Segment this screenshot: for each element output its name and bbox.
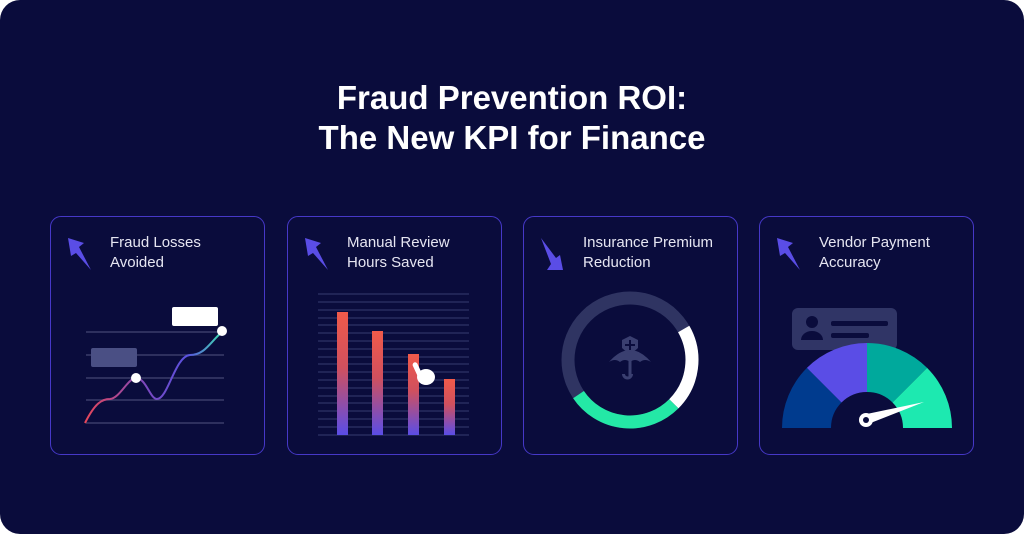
label: insurance: Insurance Premium	[583, 234, 713, 251]
label: manual review	[347, 234, 450, 271]
icon: umbrella shield	[609, 336, 651, 378]
title: The New KPI for Finance	[319, 119, 705, 156]
icon: hand pointer	[412, 361, 435, 385]
icon: arrow up 4	[777, 238, 800, 270]
label: fraud losses: Avoided	[110, 254, 164, 271]
label: vendor: Accuracy	[819, 254, 881, 271]
label: vendor: Vendor Payment	[819, 234, 930, 251]
label: fraud losses	[110, 234, 201, 271]
label: manual review: Hours Saved	[347, 254, 434, 271]
title	[318, 79, 705, 156]
panel: vendor payment accuracy	[759, 216, 974, 455]
icon: arrow down 3	[541, 238, 563, 270]
donut chart	[568, 298, 692, 422]
label: insurance	[583, 234, 713, 271]
panel: fraud losses avoided	[50, 216, 265, 455]
label: manual review: Manual Review	[347, 234, 450, 251]
id card	[792, 308, 897, 350]
panel: manual review hours	[287, 216, 502, 455]
title: Fraud Prevention ROI:	[337, 79, 687, 116]
line chart	[85, 307, 227, 423]
icon: arrow up 1	[68, 238, 91, 270]
icon: arrow up 2	[305, 238, 328, 270]
label: insurance: Reduction	[583, 254, 651, 271]
panel: insurance premium	[523, 216, 738, 455]
bar chart	[318, 294, 469, 435]
label: fraud losses: Fraud Losses	[110, 234, 201, 251]
needle	[859, 402, 924, 427]
label: vendor	[819, 234, 930, 271]
gauge	[782, 308, 952, 428]
